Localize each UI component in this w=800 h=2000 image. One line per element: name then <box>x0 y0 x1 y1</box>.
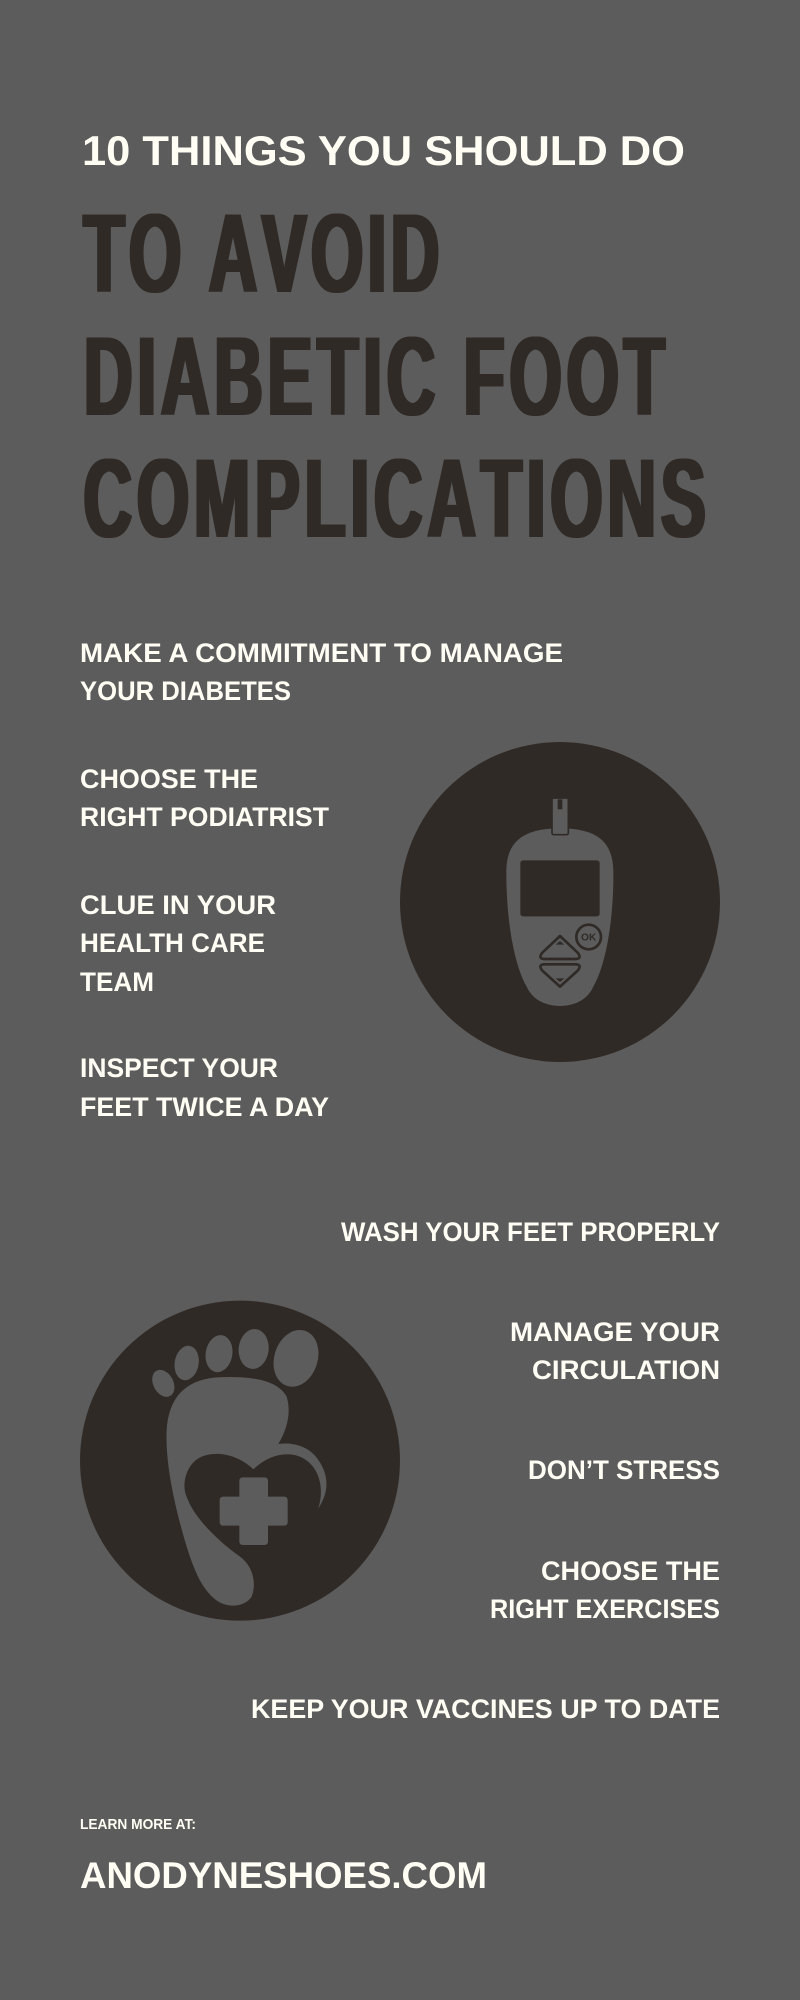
tip: manage your circulation <box>510 1317 720 1385</box>
tip: choose the right exercises <box>490 1556 720 1624</box>
tip: keep your vaccines up to date: KEEP YOUR VACCINES UP TO DATE <box>251 1694 720 1724</box>
tip: make a commitment: MAKE A COMMITMENT TO MANAGE <box>80 638 563 668</box>
tip: clue in your health care team: HEALTH CARE <box>80 928 265 958</box>
tip: choose the right podiatrist: CHOOSE THE <box>80 764 258 794</box>
main title line 2: DIABETIC FOOT <box>84 313 665 439</box>
tip: inspect your feet: INSPECT YOUR <box>80 1053 278 1083</box>
tip: choose the right podiatrist <box>80 764 329 832</box>
main title line 3: COMPLICATIONS <box>84 435 706 561</box>
tip: manage your circulation: CIRCULATION <box>532 1355 720 1385</box>
panel: first tips list <box>80 638 563 1122</box>
panel: remaining tips list <box>251 1217 720 1724</box>
tip: clue in your health care team <box>80 890 276 997</box>
tip: make a commitment <box>80 638 563 706</box>
tip: manage your circulation: MANAGE YOUR <box>510 1317 720 1347</box>
tip: wash your feet: WASH YOUR FEET PROPERLY <box>341 1217 720 1247</box>
icon: glucose meter in circle <box>400 742 720 1062</box>
main title line 1: TO AVOID <box>84 190 439 316</box>
tip: choose the right podiatrist: RIGHT PODIATRIST <box>80 802 329 832</box>
website: ANODYNESHOES.COM <box>80 1855 487 1896</box>
tip: clue in your health care team: CLUE IN YOUR <box>80 890 276 920</box>
tip: don't stress: DON’T STRESS <box>528 1455 720 1485</box>
tip: choose the right exercises: RIGHT EXERCISES <box>490 1594 720 1624</box>
main title <box>84 190 706 561</box>
label: learn more: LEARN MORE AT: <box>80 1816 196 1833</box>
icon: glucose meter in circle: OK <box>581 933 597 944</box>
icon: foot with heart and cross in circle <box>80 1301 400 1621</box>
tip: choose the right exercises: CHOOSE THE <box>541 1556 720 1586</box>
heading: title block <box>82 127 706 561</box>
tip: clue in your health care team: TEAM <box>80 967 154 997</box>
tip: inspect your feet <box>80 1053 329 1122</box>
subtitle: 10 THINGS YOU SHOULD DO <box>82 127 685 174</box>
tip: make a commitment: YOUR DIABETES <box>80 676 291 706</box>
footer: call to action <box>80 1816 487 1896</box>
tip: inspect your feet: FEET TWICE A DAY <box>80 1092 329 1122</box>
